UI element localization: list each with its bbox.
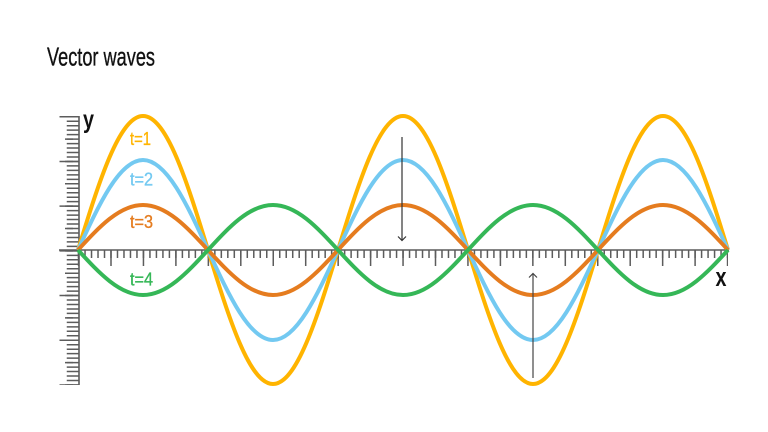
title: Vector waves: [47, 42, 155, 72]
label t=1: t=1: [130, 128, 151, 149]
wave t=2: [78, 160, 728, 340]
wave t=4: [78, 205, 728, 295]
label t=2: t=2: [130, 168, 153, 190]
arrow: upward: [529, 274, 537, 378]
y axis with ticks: [69, 116, 79, 385]
wave t=3: [78, 205, 728, 295]
x axis with ticks: [59, 250, 729, 258]
y axis label: y: [83, 106, 94, 134]
x axis label: x: [716, 262, 726, 292]
label t=4: t=4: [130, 268, 153, 290]
wave t=1: [78, 116, 728, 384]
label t=3: t=3: [130, 211, 153, 232]
arrow: downward: [398, 137, 406, 240]
